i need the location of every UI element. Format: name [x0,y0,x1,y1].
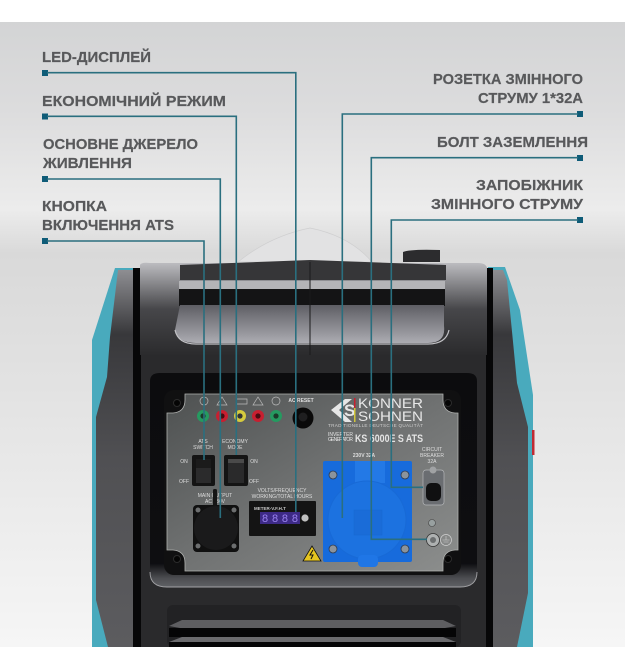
handle recess top [180,260,446,280]
front fascia [141,355,486,647]
plate [167,394,458,571]
plate mount [164,390,461,575]
blue CEE socket [323,461,412,567]
generator body [92,228,534,647]
brand logo: SOHNEN [358,409,423,424]
ATS rocker switch [179,455,215,486]
circuit breaker label [420,447,444,465]
filler cap [403,250,440,262]
red side knob [532,430,534,455]
brand logo: S [344,401,355,420]
label: main power source [42,136,220,518]
economy rocker switch: OFF [249,479,259,485]
vents [167,605,461,647]
left blue side [92,268,134,647]
label: AC fuse [391,177,584,487]
handle housing [140,263,487,355]
left grey side panel [96,270,134,647]
dome behind the generator [238,228,372,262]
economy mode label: ECONOMY [222,439,249,445]
model name: INVERTER [328,432,353,438]
model name: GENERATOR [328,437,353,443]
meter label: VOLTS/FREQUENCY [258,488,307,494]
ATS rocker switch: ON [180,459,188,465]
recess lower lip [150,572,477,587]
handle centre seam [309,262,311,355]
circuit breaker label: BREAKER [420,453,444,459]
circuit breaker [423,466,444,505]
economy mode label [222,439,249,451]
AC reset label: AC RESET [288,398,314,404]
brand logo [328,396,423,428]
label: AC socket: РОЗЕТКА ЗМІННОГО [433,71,583,88]
dark side strips [133,268,493,647]
main output socket [193,489,239,552]
main output label [198,493,232,505]
ATS switch label [193,439,213,451]
model name: KS 6000E S ATS [355,433,423,445]
main output label: MAIN OUTPUT [198,493,232,499]
AC reset button [292,408,314,428]
brand logo: TRADITIONELLE DEUTSCHE QUALITÄT [328,422,423,428]
voltage warning triangle [303,546,321,561]
ATS switch label: SWITCH [193,445,213,451]
label: grounding bolt: БОЛТ ЗАЗЕМЛЕННЯ [437,134,588,151]
label: AC fuse: ЗМІННОГО СТРУМУ [431,196,584,213]
label: economy mode [42,92,236,455]
ATS rocker switch: OFF [179,479,189,485]
brand logo: KONNER [358,396,423,411]
label: LED display: LED-ДИСПЛЕЙ [42,48,151,66]
meter label [252,488,313,500]
handle window [175,305,444,343]
handle window lower edge [175,330,449,344]
right grey side panel [490,270,528,647]
label: economy mode: ЕКОНОМІЧНИЙ РЕЖИМ [42,92,226,110]
circuit breaker label: CIRCUIT [422,447,442,453]
digital meter [249,501,316,536]
indicator lights [197,410,282,422]
grounding bolt [426,520,452,546]
economy rocker switch [224,455,259,486]
label: AC socket [342,71,583,518]
control plate [164,390,461,575]
corner screws [174,400,452,562]
panel recess [150,373,477,587]
label: ATS button: ВКЛЮЧЕННЯ ATS [42,217,174,234]
label: AC fuse: ЗАПОБІЖНИК [476,177,584,194]
digital meter: 8888 [262,513,298,525]
economy rocker switch: ON [250,459,258,465]
label: LED display [42,48,296,512]
warning icons [200,397,280,405]
label: AC socket: СТРУМУ 1*32А [478,90,583,107]
right blue side [488,267,533,647]
model name [328,432,423,445]
label: grounding bolt [371,134,588,539]
main output label: AC 230V [205,499,226,505]
digital meter: METER-V.F.H.T [254,506,286,511]
circuit breaker label: 32A [428,459,437,465]
label: main power source: ОСНОВНЕ ДЖЕРЕЛО [43,136,198,153]
label: ATS button: КНОПКА [42,198,107,215]
label: main power source: ЖИВЛЕННЯ [42,155,132,172]
ATS switch label: ATS [198,439,208,445]
meter label: WORKING/TOTAL HOURS [252,494,313,500]
socket rating label: 230V 32A [353,453,376,459]
handle bar [179,281,445,289]
economy mode label: MODE [228,445,243,451]
handle recess dark [179,288,445,306]
label: ATS button [42,198,204,460]
